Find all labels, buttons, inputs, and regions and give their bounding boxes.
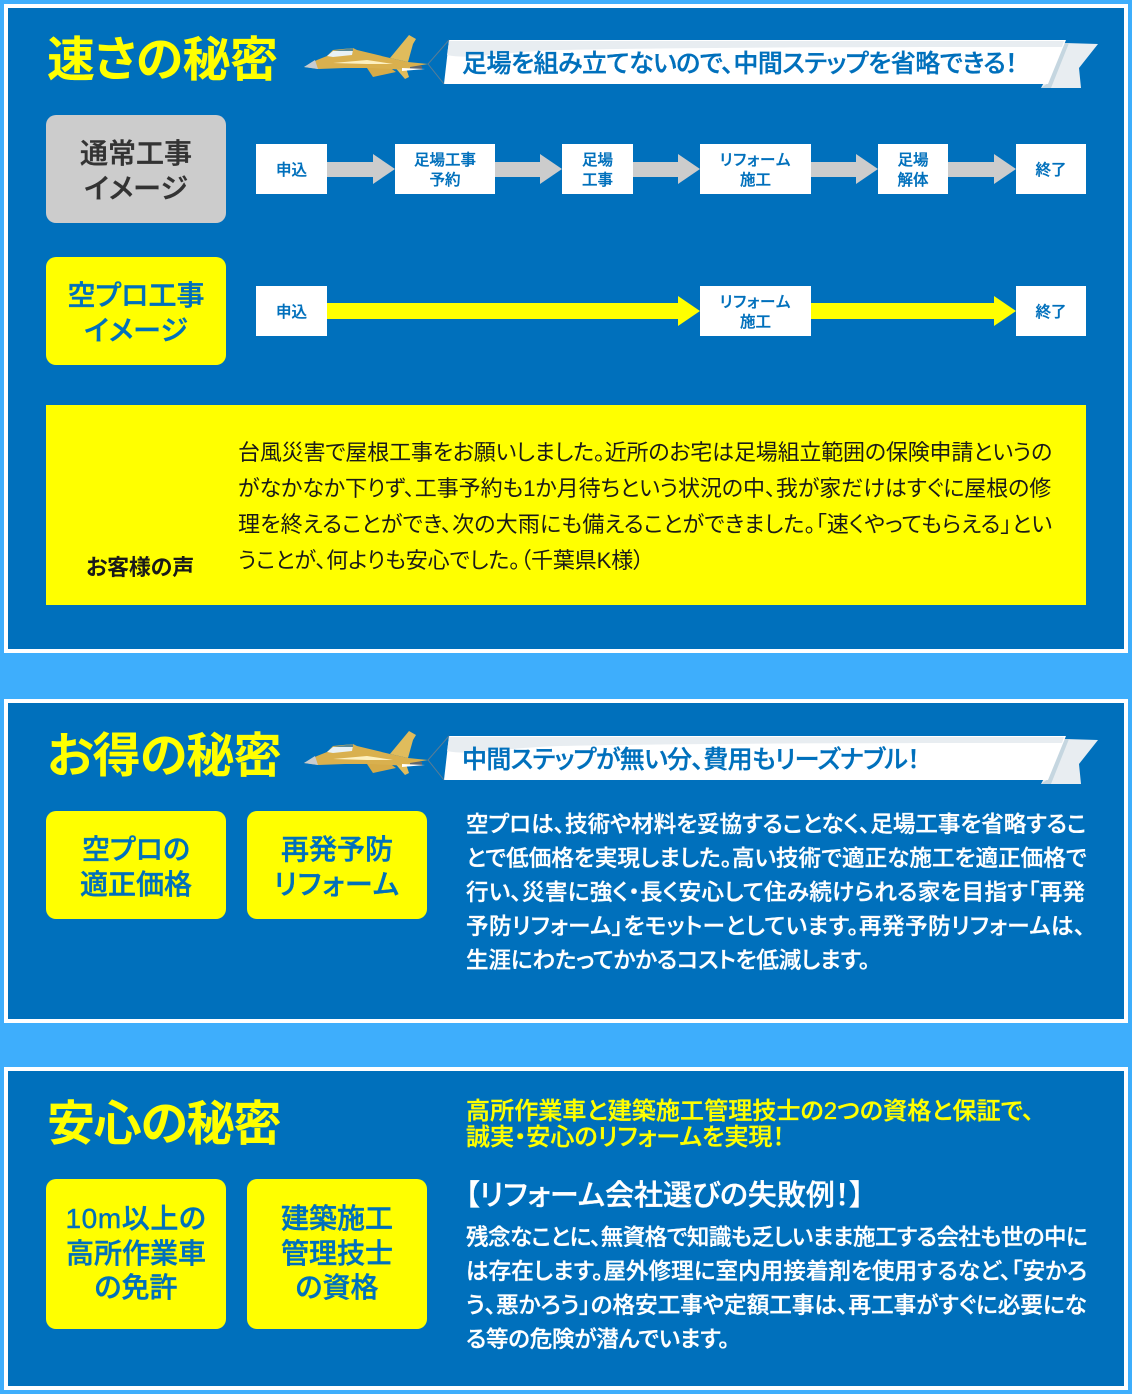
badge: construction manager qualification bbox=[247, 1179, 427, 1329]
panel: customer voice bbox=[46, 405, 1086, 605]
badge: construction manager qualification: 建築施工 bbox=[281, 1203, 393, 1234]
text: qualifications lead: 高所作業車と建築施工管理技士の2つの資格と保証で、 bbox=[466, 1098, 1034, 1125]
heading: trust secret: 安心の秘密 bbox=[47, 1098, 280, 1151]
text: value description: とで低価格を実現しました。高い技術で適正な施工を適正価格で bbox=[466, 846, 1087, 871]
flow step: scaffold reservation: 予約 bbox=[429, 172, 460, 188]
text: customer voice: 台風災害で屋根工事をお願いしました。近所のお宅は足場組立範囲の保険申請というの bbox=[238, 440, 1052, 465]
panel: value bbox=[4, 699, 1128, 1023]
text: value description bbox=[466, 812, 1087, 973]
text: failure description: う、悪かろう」の格安工事や定額工事は、再工事がすぐに必要にな bbox=[466, 1293, 1087, 1318]
flow step: reform bbox=[700, 286, 811, 336]
panel: trust bbox=[4, 1067, 1128, 1390]
badge: normal construction: イメージ bbox=[84, 172, 188, 204]
text: value description: 行い、災害に強く・長く安心して住み続けられる家を目指す「再発 bbox=[466, 880, 1085, 905]
flow step: scaffold reservation bbox=[395, 144, 495, 194]
flow step: finish bbox=[1016, 144, 1086, 194]
heading: speed secret: 速さの秘密 bbox=[47, 34, 277, 87]
heading: value secret: お得の秘密 bbox=[47, 730, 281, 783]
badge: prevention reform bbox=[247, 811, 427, 919]
flow step: apply: 申込 bbox=[276, 304, 307, 321]
flow step: reform bbox=[700, 144, 811, 194]
badge: fair price: 空プロの bbox=[82, 834, 190, 865]
badge: fair price bbox=[46, 811, 226, 919]
text: customer voice: うことが、何よりも安心でした。（千葉県K様） bbox=[238, 548, 644, 573]
flow step: reform: リフォーム bbox=[720, 294, 791, 311]
badge: high place license: の免許 bbox=[94, 1272, 178, 1303]
text: value description: 予防リフォーム」をモットーとしています。再発予防リフォームは、 bbox=[466, 914, 1086, 939]
flow step: scaffold work: 足場 bbox=[582, 152, 613, 169]
text: failure description: 残念なことに、無資格で知識も乏しいまま施工する会社も世の中に bbox=[466, 1225, 1087, 1250]
text: customer voice: 理を終えることができ、次の大雨にも備えることができました。「速くやってもらえる」とい bbox=[238, 512, 1052, 537]
badge: soupro construction bbox=[46, 257, 226, 365]
text: value description: 空プロは、技術や材料を妥協することなく、足場工事を省略するこ bbox=[466, 812, 1086, 837]
text: customer voice: がなかなか下りず、工事予約も1か月待ちという状況の中、我が家だけはすぐに屋根の修 bbox=[238, 476, 1051, 501]
flow step: scaffold removal: 足場 bbox=[897, 152, 928, 169]
flow step: scaffold work: 工事 bbox=[582, 172, 613, 188]
flow step: reform: リフォーム bbox=[720, 152, 791, 169]
icon: jet with ribbon banner bbox=[304, 35, 1098, 88]
flow step: finish: 終了 bbox=[1035, 304, 1066, 321]
label: customer voice: お客様の声 bbox=[86, 555, 194, 580]
flow step: apply bbox=[256, 286, 327, 336]
text: customer voice bbox=[238, 440, 1052, 573]
badge: normal construction: 通常工事 bbox=[80, 138, 192, 169]
flow step: finish bbox=[1016, 286, 1086, 336]
text: qualifications lead bbox=[466, 1098, 1034, 1151]
badge: construction manager qualification: 管理技士 bbox=[281, 1238, 393, 1269]
badge: normal construction bbox=[46, 115, 226, 223]
text: qualifications lead: 誠実・安心のリフォームを実現！ bbox=[466, 1124, 785, 1151]
flow step: reform: 施工 bbox=[740, 172, 771, 188]
text: value description: 生涯にわたってかかるコストを低減します。 bbox=[466, 948, 870, 973]
flow step: scaffold removal: 解体 bbox=[897, 172, 928, 188]
flow arrows: soupro bbox=[327, 296, 1016, 326]
flow arrows: normal bbox=[327, 154, 1016, 184]
flow step: apply: 申込 bbox=[276, 162, 307, 179]
badge: prevention reform: 再発予防 bbox=[281, 834, 393, 865]
badge: high place license: 高所作業車 bbox=[66, 1238, 206, 1269]
badge: soupro construction: イメージ bbox=[84, 314, 188, 346]
flow step: scaffold work bbox=[562, 144, 633, 194]
flow step: apply bbox=[256, 144, 327, 194]
badge: prevention reform: リフォーム bbox=[274, 868, 400, 900]
text: failure description bbox=[466, 1225, 1087, 1352]
badge: fair price: 適正価格 bbox=[80, 868, 192, 900]
badge: soupro construction: 空プロ工事 bbox=[67, 280, 205, 311]
badge: construction manager qualification: の資格 bbox=[295, 1272, 378, 1303]
flow step: scaffold reservation: 足場工事 bbox=[414, 152, 476, 169]
subheading: failure examples: 【リフォーム会社選びの失敗例！】 bbox=[465, 1180, 864, 1212]
ribbon text: value: 中間ステップが無い分、費用もリーズナブル！ bbox=[462, 746, 919, 774]
badge: high place license bbox=[46, 1179, 226, 1329]
panel: speed bbox=[4, 4, 1128, 653]
text: failure description: は存在します。屋外修理に室内用接着剤を使用するなど、「安かろ bbox=[466, 1259, 1087, 1284]
badge: high place license: 10m以上の bbox=[65, 1203, 207, 1234]
text: failure description: る等の危険が潜んでいます。 bbox=[466, 1327, 729, 1352]
flow step: reform: 施工 bbox=[740, 314, 771, 330]
flow step: finish: 終了 bbox=[1035, 162, 1066, 179]
flow step: scaffold removal bbox=[878, 144, 948, 194]
ribbon text: speed: 足場を組み立てないので、中間ステップを省略できる！ bbox=[462, 50, 1017, 78]
icon: jet with ribbon banner bbox=[304, 731, 1098, 784]
